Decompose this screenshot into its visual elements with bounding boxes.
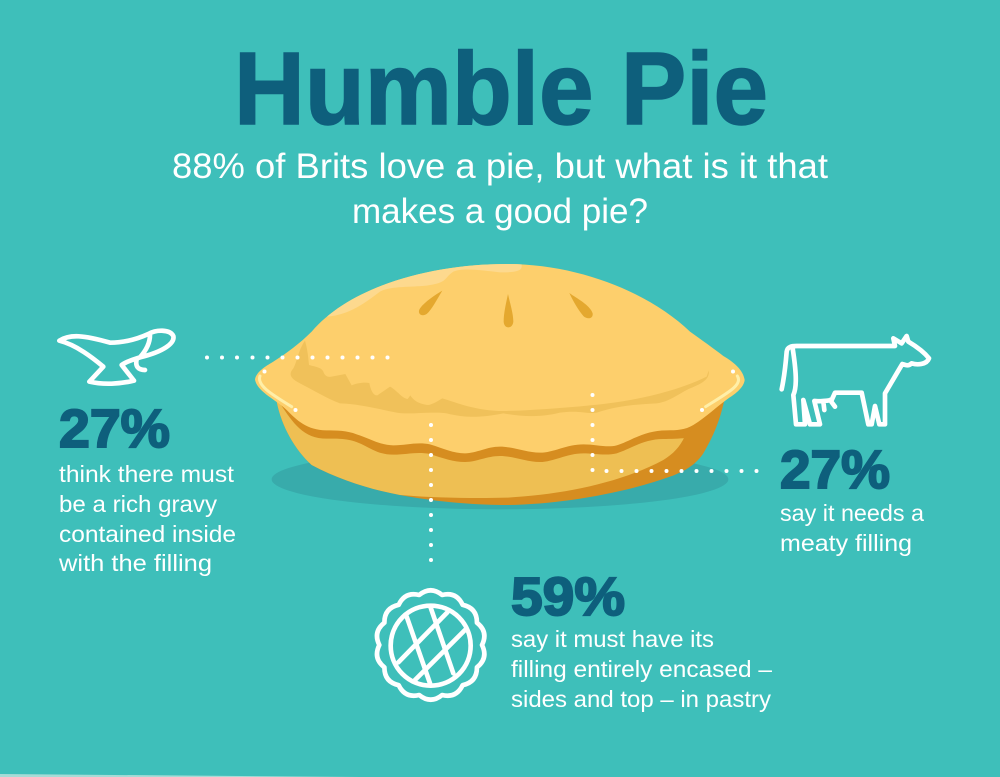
stat: gravy: with the filling bbox=[58, 550, 212, 576]
stat: meat bbox=[780, 440, 924, 556]
stat: gravy: contained inside bbox=[59, 521, 236, 547]
stat: gravy: think there must bbox=[59, 461, 235, 487]
icon: gravy boat bbox=[59, 331, 173, 384]
pie top crust bbox=[255, 264, 745, 453]
stat: meat: meaty filling bbox=[780, 530, 912, 556]
icon: pie with lattice bbox=[377, 590, 484, 700]
rim highlight right bbox=[706, 376, 739, 407]
subtitle bbox=[172, 147, 828, 231]
pie top highlight bbox=[327, 264, 522, 316]
rim highlight left bbox=[259, 376, 292, 407]
stat: gravy: be a rich gravy bbox=[59, 491, 218, 517]
stat: meat: 27% bbox=[780, 440, 890, 500]
stat: pastry bbox=[511, 567, 772, 712]
subtitle: 88% of Brits love a pie, but what is it that bbox=[172, 147, 828, 186]
pie shadow bbox=[272, 449, 728, 509]
pie dish light side bbox=[277, 402, 685, 498]
dotted leader lines bbox=[205, 356, 758, 562]
pie vent centre bbox=[504, 294, 513, 327]
pie illustration bbox=[255, 250, 745, 509]
pie dish dark side bbox=[277, 402, 724, 505]
pie vent right bbox=[569, 293, 593, 318]
stat: gravy bbox=[58, 399, 236, 576]
pie vent left bbox=[419, 291, 442, 315]
stat: pastry: say it must have its bbox=[511, 626, 714, 652]
stat: pastry: 59% bbox=[511, 567, 625, 627]
stat: gravy: 27% bbox=[59, 399, 170, 459]
icon: cow bbox=[782, 336, 929, 424]
title: Humble Pie bbox=[234, 31, 768, 146]
subtitle: makes a good pie? bbox=[352, 192, 648, 231]
stat: pastry: sides and top – in pastry bbox=[511, 686, 772, 712]
pie crust fold shading bbox=[291, 341, 709, 417]
crust wave shadow bbox=[280, 383, 707, 462]
stat: pastry: filling entirely encased – bbox=[511, 656, 772, 682]
stat: meat: say it needs a bbox=[780, 500, 924, 526]
